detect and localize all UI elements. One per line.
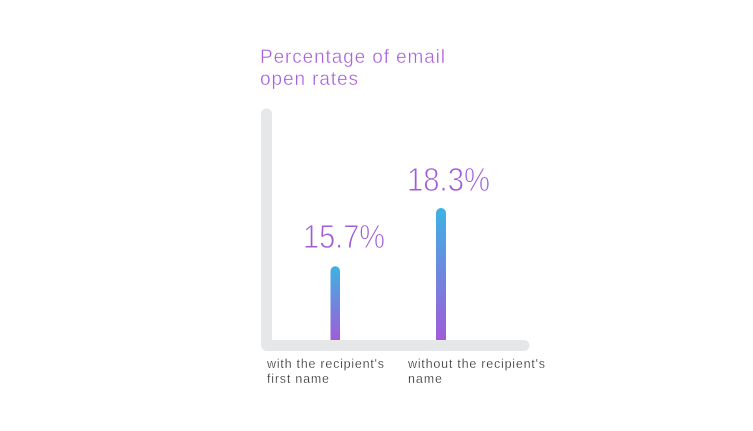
label: with the recipient's first name <box>266 357 384 386</box>
title <box>260 47 445 90</box>
bar: with the recipient's first name <box>330 266 340 340</box>
chart axes <box>261 109 530 351</box>
label: without the recipient's name: without the recipient's <box>407 357 545 371</box>
label: with the recipient's first name: with the recipient's <box>266 357 384 371</box>
title: Percentage of email <box>260 47 445 68</box>
value: 18.3%: 18.3% <box>407 161 490 198</box>
value: 15.7%: 15.7% <box>303 218 385 255</box>
label: with the recipient's first name: first name <box>267 372 329 386</box>
bar: without the recipient's name <box>436 208 446 340</box>
label: without the recipient's name <box>407 357 545 386</box>
title: open rates <box>260 69 358 90</box>
label: without the recipient's name: name <box>408 372 442 386</box>
